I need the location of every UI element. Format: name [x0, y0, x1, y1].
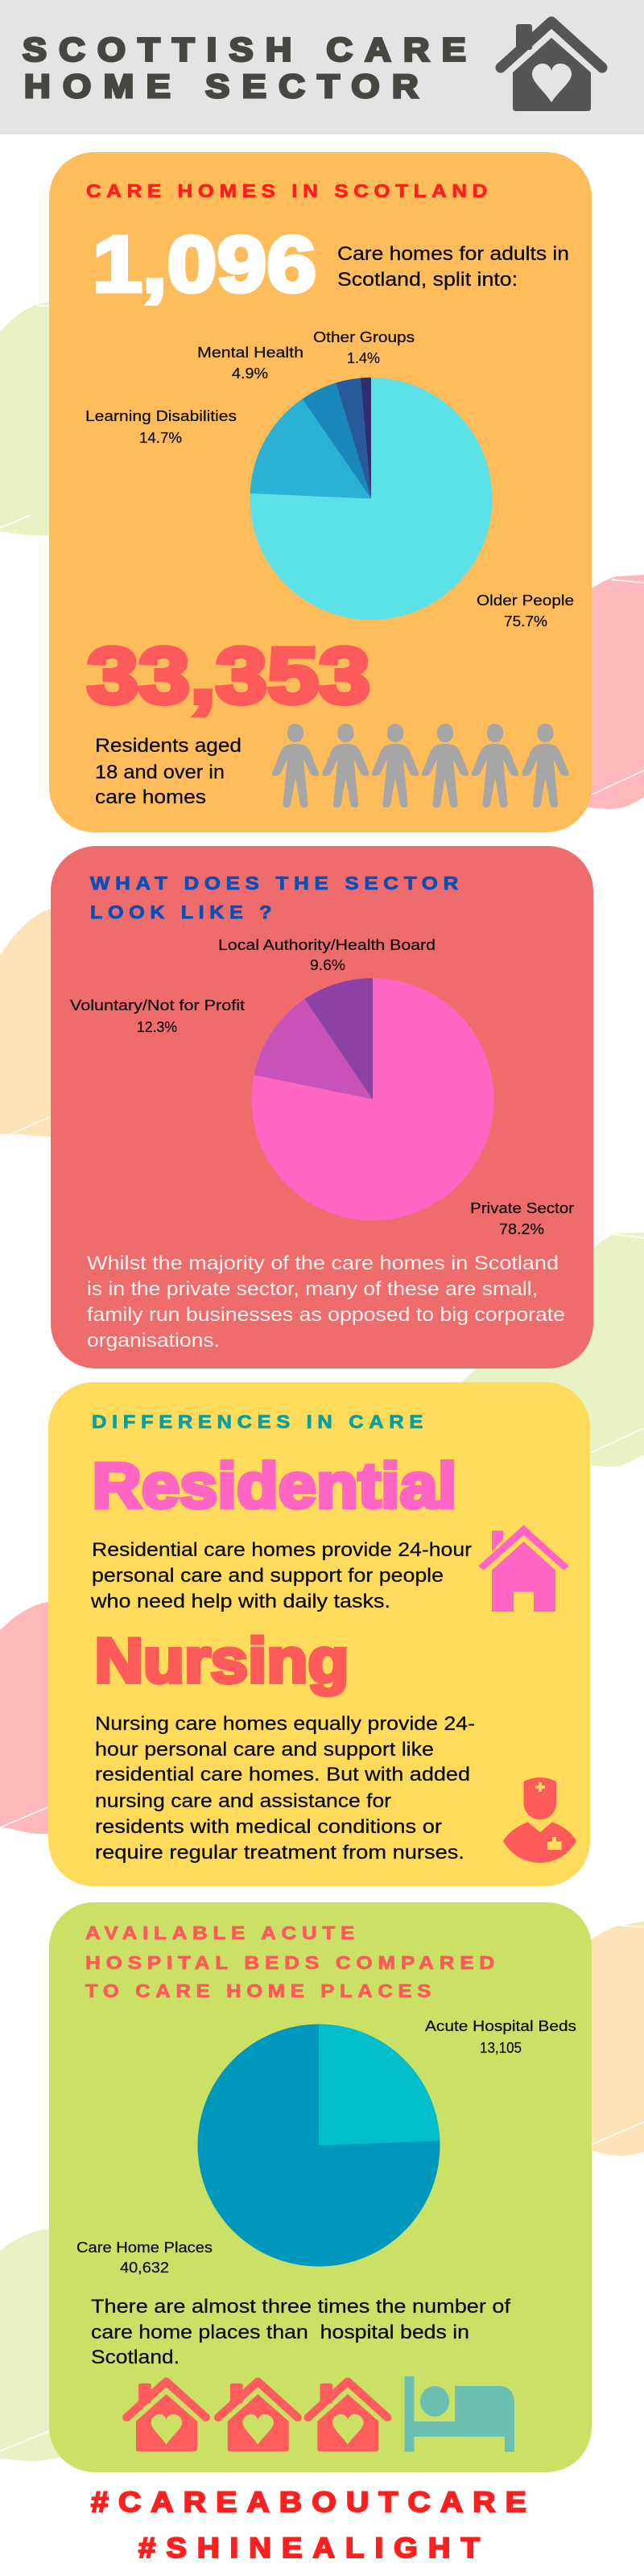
background blob: green left top [0, 302, 72, 535]
panel: hospital beds compared to care home places [49, 1902, 592, 2472]
heading: differences in care: DIFFERENCES IN CARE [92, 1411, 428, 1432]
icon: three care homes [126, 2381, 387, 2451]
label: learning disabilities [85, 408, 237, 446]
icon: nurse [503, 1777, 576, 1863]
text: residents: care homes [95, 786, 206, 808]
label: acute hospital beds: 13,105 [480, 2040, 522, 2056]
label: acute hospital beds: Acute Hospital Beds [425, 2018, 576, 2034]
background blob: green right [462, 1232, 644, 1467]
text: residents: Residents aged [95, 735, 242, 757]
background blob: peach left [0, 909, 72, 1137]
label: private sector [470, 1200, 574, 1237]
hashtags: #CAREABOUTCARE [91, 2487, 536, 2518]
header band [0, 0, 644, 134]
label: older people: 75.7% [504, 613, 547, 630]
icon: house with heart [501, 22, 602, 111]
text: nursing description [95, 1713, 475, 1864]
text: nursing description: residential care homes. But with added [95, 1764, 470, 1785]
title [23, 31, 478, 105]
text: comparison explanation [91, 2296, 510, 2368]
heading: care homes in Scotland: CARE HOMES IN SCOTLAND [86, 180, 493, 201]
text: care homes for adults [337, 243, 569, 291]
label: voluntary: Voluntary/Not for Profit [70, 997, 245, 1013]
text: nursing description: Nursing care homes equally provide 24- [95, 1713, 475, 1735]
background blob: pink left [0, 1602, 72, 1834]
title: SCOTTISH CARE [23, 31, 478, 68]
text: residential description [90, 1539, 472, 1612]
text: sector explanation: family run businesses as opposed to big corporate [87, 1304, 565, 1326]
text: comparison explanation: There are almost three times the number of [91, 2296, 510, 2318]
heading: available acute hospital beds: HOSPITAL BEDS COMPARED [85, 1952, 500, 1973]
heading: what does the sector look like: WHAT DOES THE SECTOR [90, 873, 464, 894]
label: local authority: 9.6% [310, 957, 345, 973]
label: other groups: Other Groups [313, 329, 415, 345]
label: private sector: 78.2% [499, 1221, 544, 1237]
label: other groups: 1.4% [347, 350, 380, 366]
text: sector explanation: Whilst the majority of the care homes in Scotland [87, 1253, 559, 1274]
text: residential description: personal care and support for people [92, 1565, 444, 1587]
heading: nursing: Nursing [95, 1624, 349, 1695]
big number: 33,353: 33,353 [87, 631, 370, 720]
label: voluntary [70, 997, 245, 1035]
text: nursing description: residents with medical conditions or [95, 1816, 442, 1838]
heading: what does the sector look like [90, 873, 464, 923]
label: older people [477, 592, 574, 630]
text: comparison explanation: Scotland. [91, 2347, 180, 2368]
panel: care homes in Scotland [49, 152, 592, 832]
label: acute hospital beds [425, 2018, 576, 2056]
hashtags [91, 2487, 536, 2564]
label: care home places: 40,632 [120, 2260, 169, 2276]
text: residents: 18 and over in [95, 762, 225, 783]
label: private sector: Private Sector [470, 1200, 574, 1216]
text: residential description: who need help with daily tasks. [90, 1591, 390, 1612]
label: learning disabilities: 14.7% [139, 430, 182, 446]
label: older people: Older People [477, 592, 574, 609]
icon: hospital bed [404, 2376, 514, 2452]
panel: what does the sector look like [51, 846, 593, 1368]
background blob: pink right top [564, 575, 644, 809]
text: nursing description: hour personal care and support like [95, 1739, 434, 1761]
text: sector explanation: organisations. [87, 1330, 220, 1352]
label: mental health: Mental Health [197, 345, 303, 361]
text: nursing description: nursing care and assistance for [95, 1790, 391, 1812]
text: care homes for adults: Scotland, split into: [337, 269, 518, 291]
label: mental health: 4.9% [232, 365, 268, 382]
heading: what does the sector look like: LOOK LIKE ? [90, 902, 277, 923]
heading: available acute hospital beds: TO CARE HOME PLACES [85, 1980, 436, 2001]
label: local authority [218, 937, 436, 973]
background blob: peach right [564, 1922, 644, 2156]
text: sector explanation: is in the private sector, many of these are small, [87, 1278, 538, 1300]
label: learning disabilities: Learning Disabilities [85, 408, 237, 424]
panel: differences in care [48, 1382, 590, 1886]
big number: 1,096: 1,096 [93, 220, 316, 308]
heading: residential: Residential [92, 1449, 457, 1521]
title: HOME SECTOR [24, 68, 431, 105]
label: voluntary: 12.3% [137, 1019, 177, 1035]
text: nursing description: require regular treatment from nurses. [95, 1842, 464, 1864]
label: local authority: Local Authority/Health Board [218, 937, 436, 953]
icon: pink house [478, 1525, 569, 1612]
hashtags: #SHINEALIGHT [138, 2533, 490, 2564]
text: care homes for adults: Care homes for adults in [337, 243, 569, 265]
icon: row of six people [272, 724, 569, 807]
label: mental health [197, 345, 303, 382]
text: residential description: Residential care homes provide 24-hour [92, 1539, 472, 1561]
heading: available acute hospital beds [85, 1922, 500, 2001]
heading: available acute hospital beds: AVAILABLE ACUTE [85, 1922, 360, 1943]
background blob: green left bottom [0, 2228, 80, 2461]
label: other groups [313, 329, 415, 366]
label: care home places: Care Home Places [76, 2240, 213, 2256]
pie chart: sector ownership [251, 978, 494, 1220]
text: residents [95, 735, 242, 808]
label: care home places [76, 2240, 213, 2276]
pie chart: care home groups [250, 378, 493, 620]
text: sector explanation [87, 1253, 565, 1352]
text: comparison explanation: care home places than hospital beds in [91, 2322, 469, 2343]
pie chart: beds vs places [198, 2024, 440, 2267]
